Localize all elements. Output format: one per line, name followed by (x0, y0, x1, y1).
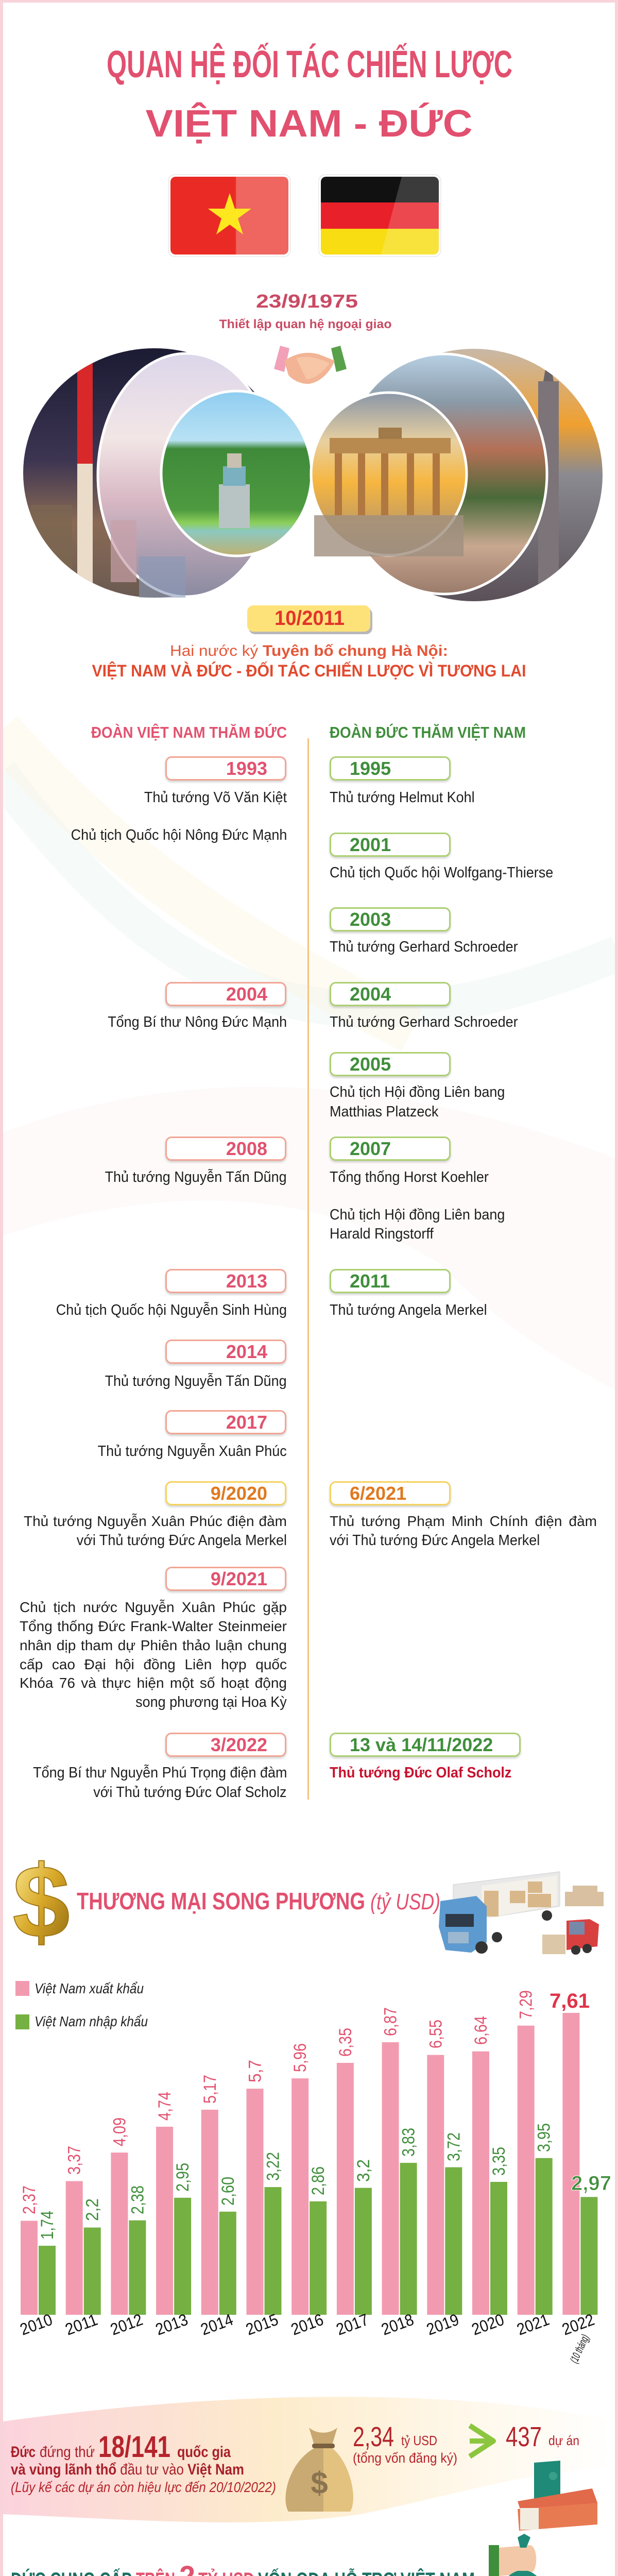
trade heading: (tỷ USD) (370, 1889, 440, 1914)
2004 (165, 982, 286, 1006)
milestone: 10/2011: 10/2011 (274, 607, 345, 630)
2001 (330, 833, 451, 857)
heading: Vietnam delegations: ĐOÀN VIỆT NAM THĂM ĐỨC (91, 723, 287, 741)
stat: projects: dự án (548, 2433, 579, 2448)
timeline: Vietnam visits: Tổng thống Đức Frank-Walter Steinmeier (20, 1618, 287, 1634)
trade heading: THƯƠNG MẠI SONG PHƯƠNG (77, 1888, 365, 1914)
9/2021: 9/2021 (211, 1568, 267, 1589)
3/2022 (165, 1733, 286, 1757)
timeline: German visits: Thủ tướng Đức Olaf Scholz (330, 1765, 511, 1781)
timeline: German visits: Thủ tướng Phạm Minh Chính điện đàm (330, 1513, 597, 1529)
year axis labels: (10 tháng) (568, 2332, 592, 2365)
timeline: German visits: Thủ tướng Helmut Kohl (330, 789, 475, 806)
year axis labels: 2019 (424, 2310, 461, 2339)
import values (38, 2123, 611, 2240)
import values: 2,86 (308, 2166, 328, 2195)
export values: 2,37 (20, 2185, 39, 2214)
import values: 3,2 (354, 2159, 373, 2182)
import values: 3,22 (264, 2152, 283, 2181)
icon: handshake (274, 346, 347, 384)
year axis labels (18, 2310, 597, 2365)
header section (23, 43, 603, 741)
timeline: Vietnam visits: Khóa 76 và thực hiện một số hoạt động (20, 1675, 287, 1691)
year axis labels: 2016 (288, 2310, 326, 2339)
13 và 14/11/2022: 13 và 14/11/2022 (350, 1734, 493, 1755)
milestone: 10/2011 (247, 605, 372, 634)
stat: projects: 437 (506, 2421, 542, 2452)
2011 (330, 1269, 451, 1293)
1995 (330, 756, 451, 781)
photo collage: Germany (311, 349, 603, 603)
export values: 6,87 (381, 2007, 401, 2036)
timeline: German visits: Harald Ringstorff (330, 1226, 434, 1242)
date: 23/9/1975 (219, 291, 391, 331)
date: 23/9/1975: 23/9/1975 (256, 291, 358, 312)
2008 (165, 1137, 286, 1161)
timeline: Vietnam visits: Thủ tướng Võ Văn Kiệt (144, 789, 287, 806)
export values: 6,35 (336, 2028, 355, 2057)
flag: Germany (319, 175, 441, 257)
2004: 2004 (226, 984, 267, 1005)
year axis labels: 2018 (379, 2310, 416, 2339)
timeline: Vietnam visits: cấp cao Đại hội đồng Liên hợp quốc (20, 1656, 287, 1672)
export values: 4,74 (155, 2092, 175, 2121)
icon: hand with ODA money bag (489, 2534, 542, 2576)
icon: money bag: $ (311, 2466, 328, 2500)
year axis labels: 2017 (334, 2310, 371, 2339)
export values: 4,09 (110, 2117, 129, 2146)
investment ranking text: đứng thứ (40, 2444, 95, 2461)
timeline: German visits: với Thủ tướng Đức Angela Merkel (330, 1532, 540, 1549)
investment ranking text: (Lũy kế các dự án còn hiệu lực đến 20/10/2022) (11, 2479, 276, 2495)
import values: 3,95 (535, 2123, 554, 2152)
statement: Hanoi joint declaration (92, 642, 526, 680)
year axis labels: 2014 (198, 2310, 235, 2339)
timeline: Vietnam visits: Thủ tướng Nguyễn Xuân Phúc (98, 1443, 287, 1460)
year axis labels: 2021 (514, 2310, 552, 2339)
title: VIỆT NAM - ĐỨC (145, 102, 473, 145)
export values: 5,17 (200, 2075, 220, 2104)
3/2022: 3/2022 (211, 1734, 267, 1755)
import values: 2,97 (571, 2172, 611, 2195)
year axis labels: 2012 (108, 2310, 145, 2339)
timeline: German visits: Chủ tịch Quốc hội Wolfgang-Thierse (330, 865, 553, 881)
icon: gold dollar: $ (12, 1844, 70, 1959)
stat: registered capital (353, 2421, 457, 2466)
2014 (165, 1340, 286, 1364)
legend: Việt Nam xuất khẩu (35, 1980, 144, 1996)
timeline: German visits: Chủ tịch Hội đồng Liên bang (330, 1207, 505, 1223)
year axis labels: 2015 (244, 2310, 281, 2339)
investment ranking text: quốc gia (177, 2444, 231, 2461)
2013 (165, 1269, 286, 1293)
timeline center line (307, 738, 309, 1800)
photo collage: Vietnam (23, 348, 312, 598)
import values: 3,72 (444, 2132, 464, 2161)
timeline: German visits (329, 756, 597, 1781)
stat: registered capital: tỷ USD (401, 2433, 437, 2448)
export values: 5,7 (245, 2060, 265, 2082)
import values: 3,83 (399, 2128, 419, 2157)
investment band background (3, 2397, 615, 2522)
import values: 2,95 (173, 2163, 193, 2192)
2001: 2001 (350, 834, 391, 855)
timeline: German visits: Thủ tướng Gerhard Schroeder (330, 1014, 518, 1030)
2011: 2011 (350, 1270, 390, 1292)
flag: Vietnam (168, 175, 290, 257)
import values: 1,74 (38, 2211, 57, 2240)
stat: projects (506, 2421, 579, 2452)
date: 23/9/1975: Thiết lập quan hệ ngoại giao (219, 317, 391, 331)
export values: 5,96 (290, 2043, 310, 2072)
timeline: German visits: Thủ tướng Angela Merkel (330, 1302, 487, 1318)
export bars (21, 2013, 579, 2315)
6/2021: 6/2021 (350, 1483, 406, 1504)
export values (20, 1990, 590, 2214)
icon: truck and forklift (439, 1872, 604, 1955)
bar chart: bilateral trade 2010-2022 (18, 1990, 611, 2365)
timeline: German visits: Matthias Platzeck (330, 1104, 438, 1120)
timeline: German visits: Thủ tướng Gerhard Schroeder (330, 939, 518, 955)
icon: money bag (285, 2428, 353, 2512)
export values: 6,64 (471, 2016, 491, 2045)
1993: 1993 (226, 758, 267, 779)
icon: binders (518, 2461, 597, 2531)
1995: 1995 (350, 758, 391, 779)
2013: 2013 (226, 1270, 267, 1292)
trade, investment, ODA section (3, 1844, 611, 2576)
year axis labels: 2010 (18, 2310, 55, 2339)
year axis labels: 2011 (63, 2310, 100, 2339)
timeline: Vietnam visits: nhân dịp tham dự Phiên thảo luận chung (20, 1637, 287, 1653)
timeline: German visits: Tổng thống Horst Koehler (330, 1169, 489, 1185)
arrow (470, 2426, 493, 2456)
legend: Việt Nam nhập khẩu (35, 2013, 148, 2029)
title (107, 43, 512, 145)
export values: 6,55 (426, 2020, 445, 2048)
statement: Hanoi joint declaration: VIỆT NAM VÀ ĐỨC - ĐỐI TÁC CHIẾN LƯỢC VÌ TƯƠNG LAI (92, 662, 526, 680)
export values: 7,61 (550, 1990, 590, 2012)
import values: 2,2 (83, 2198, 102, 2221)
2003: 2003 (350, 909, 391, 930)
timeline: Vietnam visits (20, 756, 287, 1801)
2004 (330, 982, 451, 1006)
year axis labels: 2020 (469, 2310, 506, 2339)
stat: registered capital: (tổng vốn đăng ký) (353, 2450, 457, 2466)
2004: 2004 (350, 984, 391, 1005)
2003 (330, 907, 451, 931)
2014: 2014 (226, 1341, 267, 1362)
investment ranking text (11, 2430, 276, 2495)
timeline: Vietnam visits: Chủ tịch Quốc hội Nguyễn Sinh Hùng (56, 1302, 287, 1318)
timeline: Vietnam visits: song phương tại Hoa Kỳ (135, 1694, 287, 1710)
import values: 3,35 (489, 2147, 509, 2176)
2005: 2005 (350, 1054, 391, 1075)
import values: 2,60 (218, 2177, 238, 2206)
legend (15, 1980, 148, 2029)
2005 (330, 1052, 451, 1076)
year axis labels: 2013 (153, 2310, 191, 2339)
investment ranking text: và vùng lãnh thổ đầu tư vào Việt Nam (11, 2461, 244, 2478)
9/2020 (165, 1481, 286, 1505)
2007 (330, 1137, 451, 1161)
timeline: Vietnam visits: Chủ tịch Quốc hội Nông Đức Mạnh (71, 827, 287, 843)
9/2020: 9/2020 (211, 1483, 267, 1504)
timeline: Vietnam visits: Tổng Bí thư Nông Đức Mạnh (108, 1014, 287, 1030)
ODA heading (11, 2560, 475, 2576)
timeline: Vietnam visits: Thủ tướng Nguyễn Xuân Phúc điện đàm (24, 1513, 287, 1529)
year axis labels: 2022 (559, 2310, 597, 2339)
13 và 14/11/2022 (330, 1733, 521, 1757)
timeline: Vietnam visits: Thủ tướng Nguyễn Tấn Dũng (105, 1373, 287, 1389)
investment ranking text: 18/141 (98, 2430, 170, 2464)
2017 (165, 1410, 286, 1434)
timeline: German visits: Chủ tịch Hội đồng Liên bang (330, 1084, 505, 1100)
import values: 2,38 (128, 2185, 147, 2214)
timeline: Vietnam visits: với Thủ tướng Đức Angela Merkel (77, 1532, 287, 1549)
timeline: Vietnam visits: với Thủ tướng Đức Olaf Scholz (94, 1784, 287, 1801)
heading: German delegations: ĐOÀN ĐỨC THĂM VIỆT NAM (330, 723, 526, 741)
1993 (165, 756, 286, 781)
statement: Hanoi joint declaration: Hai nước ký Tuyên bố chung Hà Nội: (170, 642, 448, 659)
export values: 3,37 (65, 2146, 84, 2175)
2007: 2007 (350, 1138, 391, 1159)
9/2021 (165, 1567, 286, 1591)
2008: 2008 (226, 1138, 267, 1159)
6/2021 (330, 1481, 451, 1505)
stat: registered capital: 2,34 (353, 2421, 394, 2452)
export values: 7,29 (517, 1990, 536, 2019)
timeline: Vietnam visits: Tổng Bí thư Nguyễn Phú Trọng điện đàm (33, 1765, 287, 1781)
import bars (39, 2158, 597, 2315)
timeline: Vietnam visits: Chủ tịch nước Nguyễn Xuân Phúc gặp (20, 1599, 287, 1615)
2017: 2017 (226, 1412, 267, 1433)
timeline: Vietnam visits: Thủ tướng Nguyễn Tấn Dũng (105, 1169, 287, 1185)
investment ranking text: Đức (11, 2444, 36, 2461)
